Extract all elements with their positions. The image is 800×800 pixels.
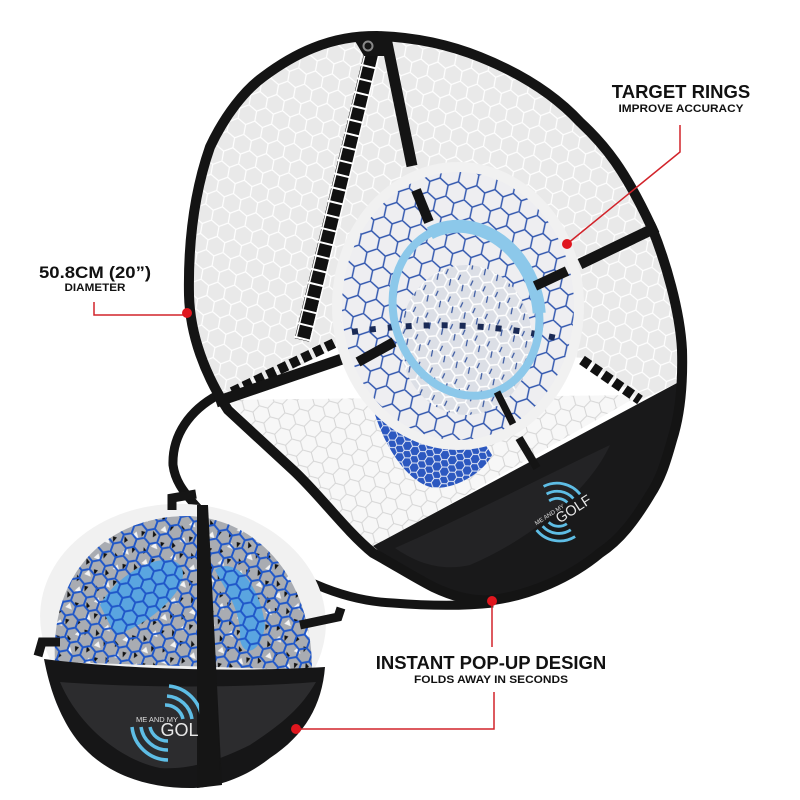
callout: diameter <box>39 263 192 318</box>
strap over logo <box>199 700 220 770</box>
logo on main pouch: GOLF <box>553 492 595 527</box>
callout: target rings: TARGET RINGS <box>612 81 750 102</box>
logo on main pouch: ME AND MY <box>534 504 566 527</box>
logo on folded pouch: GOLF <box>160 720 210 740</box>
grommet <box>352 33 386 56</box>
cross straps <box>358 190 567 424</box>
callout: diameter: DIAMETER <box>64 282 126 294</box>
callout: pop-up design <box>291 596 606 734</box>
side straps <box>38 494 341 656</box>
callout: pop-up design: INSTANT POP-UP DESIGN <box>376 652 606 673</box>
callout: pop-up design: FOLDS AWAY IN SECONDS <box>414 674 568 686</box>
upper net panel <box>189 36 682 402</box>
light blue ring <box>371 207 561 415</box>
floor net <box>228 395 640 548</box>
front hoop <box>189 36 682 600</box>
inner white net <box>400 265 532 415</box>
dark netted band behind the opening <box>352 325 565 340</box>
callout: target rings <box>562 81 750 249</box>
white rim <box>32 494 334 746</box>
netted lower bands <box>232 338 640 400</box>
logo on main pouch <box>519 469 603 552</box>
lower blue tail of net <box>373 408 492 488</box>
pouch sheen <box>395 445 610 567</box>
black support straps <box>216 38 657 468</box>
pouch fabric panel <box>60 682 316 768</box>
folded black pouch <box>44 659 325 788</box>
netted vertical strap <box>296 50 379 342</box>
black lower pouch <box>373 383 678 600</box>
main chipping net <box>173 33 682 605</box>
logo on folded pouch: ME AND MY <box>136 715 178 724</box>
folded net <box>32 494 341 788</box>
blue netting <box>55 516 312 670</box>
dark interior of folded net <box>55 516 312 670</box>
target ring <box>337 167 579 445</box>
vertical strap <box>197 505 222 788</box>
light blue ring pieces <box>100 560 265 651</box>
rear hoop <box>173 395 493 605</box>
callout: target rings: IMPROVE ACCURACY <box>618 103 744 115</box>
callout: diameter: 50.8CM (20”) <box>39 263 151 282</box>
logo on folded pouch <box>132 686 210 760</box>
